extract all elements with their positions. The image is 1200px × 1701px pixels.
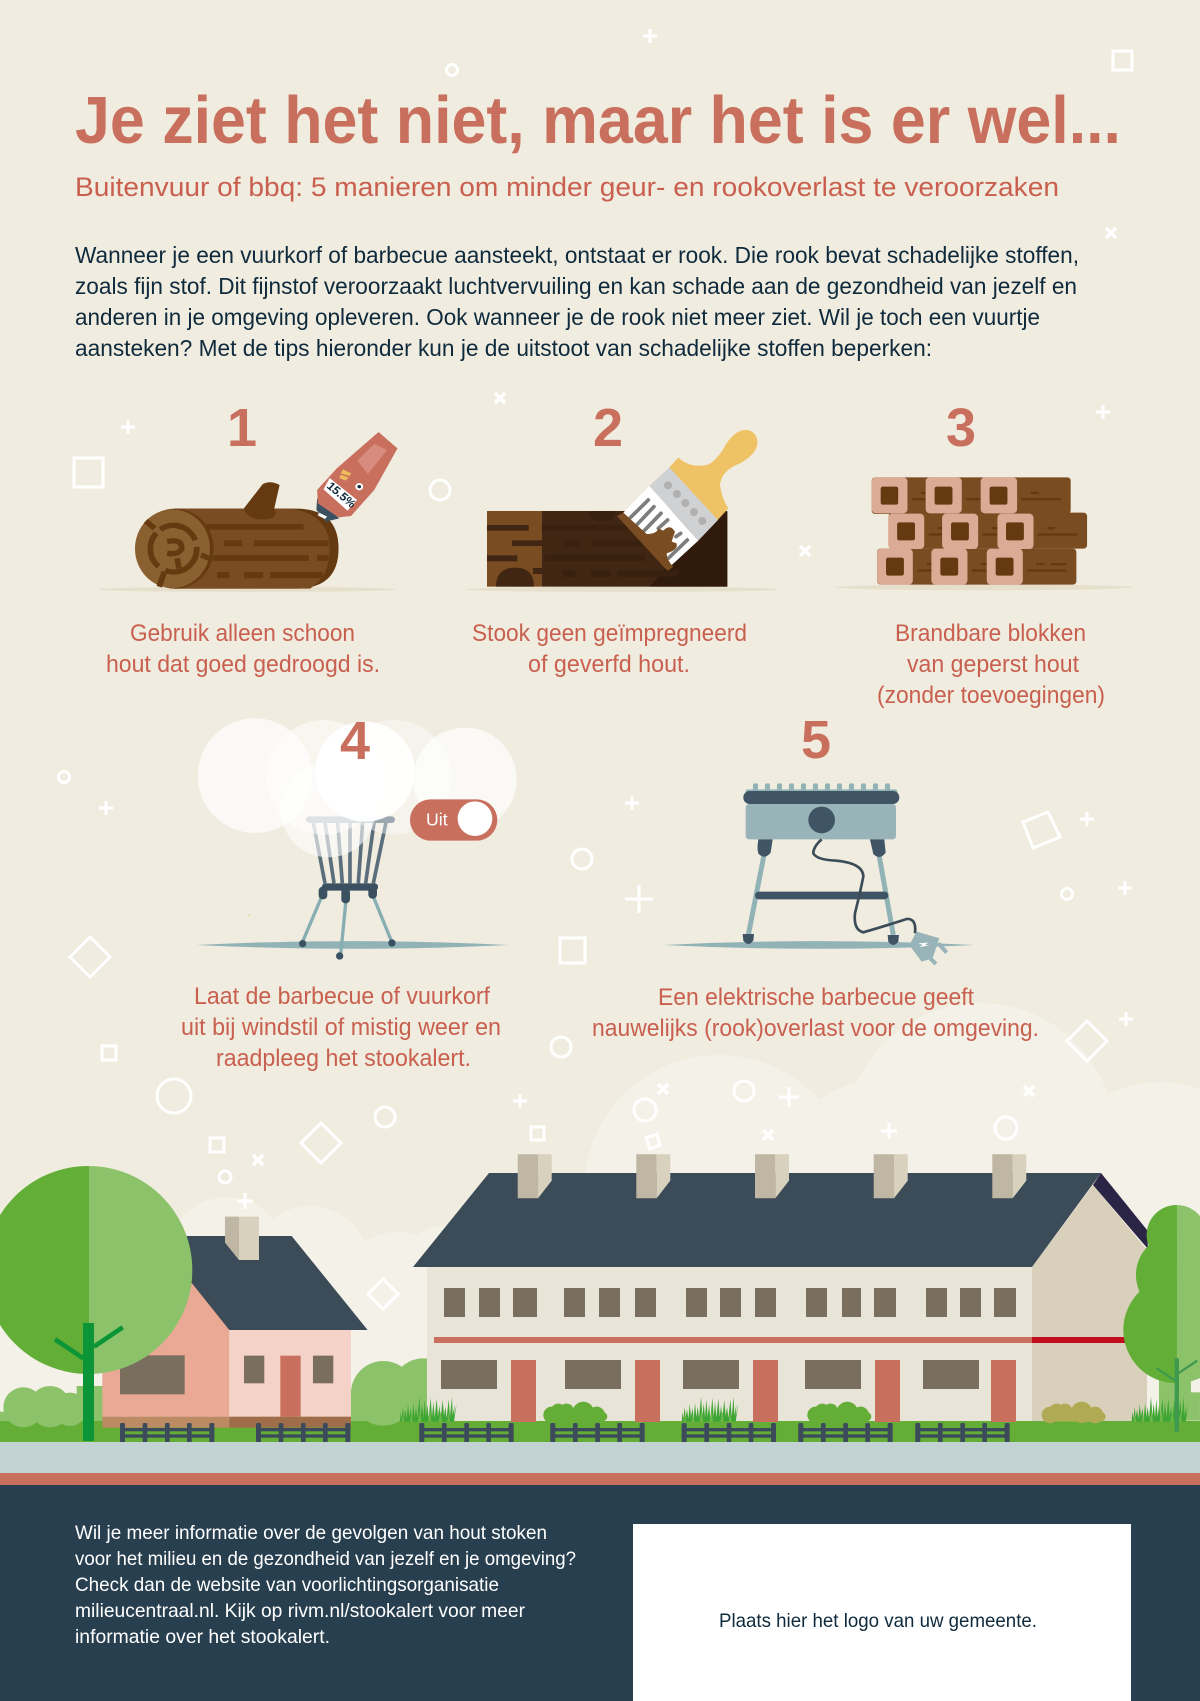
- left bushes: [0, 1358, 455, 1427]
- number 2: 2: [593, 398, 623, 458]
- footer information text: Wil je meer informatie over de gevolgen van hout stoken: [75, 1522, 547, 1544]
- footer information text: [75, 1522, 576, 1648]
- number 3: 3: [946, 398, 976, 458]
- icon: stack of pressed wood blocks: [836, 477, 1132, 590]
- intro paragraph: zoals fijn stof. Dit fijnstof veroorzaakt luchtvervuiling en kan schade aan de gezondheid van jezelf en: [75, 273, 1077, 299]
- red band: [0, 1473, 1200, 1485]
- caption 4: [181, 983, 501, 1072]
- small pink house: [102, 1217, 368, 1428]
- panel: tip 3 pressed wood blocks: [836, 398, 1132, 709]
- footer information text: Check dan de website van voorlichtingsorganisatie: [75, 1574, 499, 1596]
- right tree: [1123, 1205, 1200, 1421]
- shrubs and grass: [400, 1397, 1188, 1423]
- icon: fire basket with smoke and off switch: Uit: [426, 810, 448, 830]
- intro paragraph: aansteken? Met de tips hieronder kun je de uitstoot van schadelijke stoffen beperken:: [75, 335, 932, 361]
- caption 4: uit bij windstil of mistig weer en: [181, 1014, 501, 1041]
- icon: log with moisture meter: 15.5%: [324, 480, 359, 511]
- number 5: 5: [801, 710, 831, 770]
- caption 2: Stook geen geïmpregneerd: [472, 620, 747, 647]
- footer information text: informatie over het stookalert.: [75, 1626, 330, 1648]
- large green tree: [0, 1166, 192, 1441]
- ground grass strip: [0, 1421, 1200, 1442]
- icon: fire basket with smoke and off switch: [197, 718, 517, 960]
- panel: tip 5 electric barbecue: [592, 710, 1039, 1042]
- caption 1: Gebruik alleen schoon: [130, 620, 355, 647]
- caption 4: Laat de barbecue of vuurkorf: [194, 983, 490, 1010]
- road: [0, 1442, 1200, 1473]
- panel: tip 1 dry wood: [99, 398, 397, 678]
- icon: log with moisture meter: [99, 432, 397, 592]
- icon: electric barbecue with plug: [663, 783, 974, 964]
- row of houses: [413, 1154, 1148, 1422]
- logo placeholder box: [633, 1524, 1131, 1701]
- caption 2: [472, 620, 747, 678]
- caption 5: Een elektrische barbecue geeft: [658, 984, 974, 1011]
- garden fences: [120, 1423, 1010, 1442]
- clouds behind the houses: [0, 1003, 1200, 1430]
- caption 1: hout dat goed gedroogd is.: [106, 651, 380, 678]
- panel: footer: [0, 1485, 1200, 1701]
- caption 2: of geverfd hout.: [528, 651, 690, 678]
- scene: neighbourhood: [0, 1154, 1200, 1473]
- caption 3: [877, 620, 1105, 709]
- number 1: 1: [227, 398, 257, 458]
- subtitle: Buitenvuur of bbq: 5 manieren om minder geur- en rookoverlast te veroorzaken: [75, 172, 1059, 202]
- panel: tip 4 no fire on windless days: [181, 711, 517, 1072]
- panel: tip 2 no painted wood: [465, 398, 778, 678]
- caption 3: Brandbare blokken: [895, 620, 1086, 647]
- decorative smoke particles: [58, 29, 1133, 1309]
- footer information text: voor het milieu en de gezondheid van jezelf en je omgeving?: [75, 1548, 576, 1570]
- right tree trunk: [1157, 1358, 1197, 1432]
- caption 5: nauwelijks (rook)overlast voor de omgeving.: [592, 1015, 1039, 1042]
- number 4: 4: [340, 711, 370, 771]
- logo placeholder box: Plaats hier het logo van uw gemeente.: [719, 1610, 1037, 1632]
- icon: painted wood with brush: [465, 430, 778, 592]
- caption 3: van geperst hout: [907, 651, 1079, 678]
- intro paragraph: anderen in je omgeving opleveren. Ook wanneer je de rook niet meer ziet. Wil je toch een vuurtje: [75, 304, 1040, 330]
- title: Je ziet het niet, maar het is er wel...: [75, 83, 1121, 158]
- caption 5: [592, 984, 1039, 1042]
- caption 4: raadpleeg het stookalert.: [216, 1045, 471, 1072]
- footer information text: milieucentraal.nl. Kijk op rivm.nl/stookalert voor meer: [75, 1600, 525, 1622]
- intro paragraph: [75, 242, 1079, 361]
- caption 1: [106, 620, 380, 678]
- intro paragraph: Wanneer je een vuurkorf of barbecue aansteekt, ontstaat er rook. Die rook bevat schadelijke stoffen,: [75, 242, 1079, 268]
- caption 3: (zonder toevoegingen): [877, 682, 1105, 709]
